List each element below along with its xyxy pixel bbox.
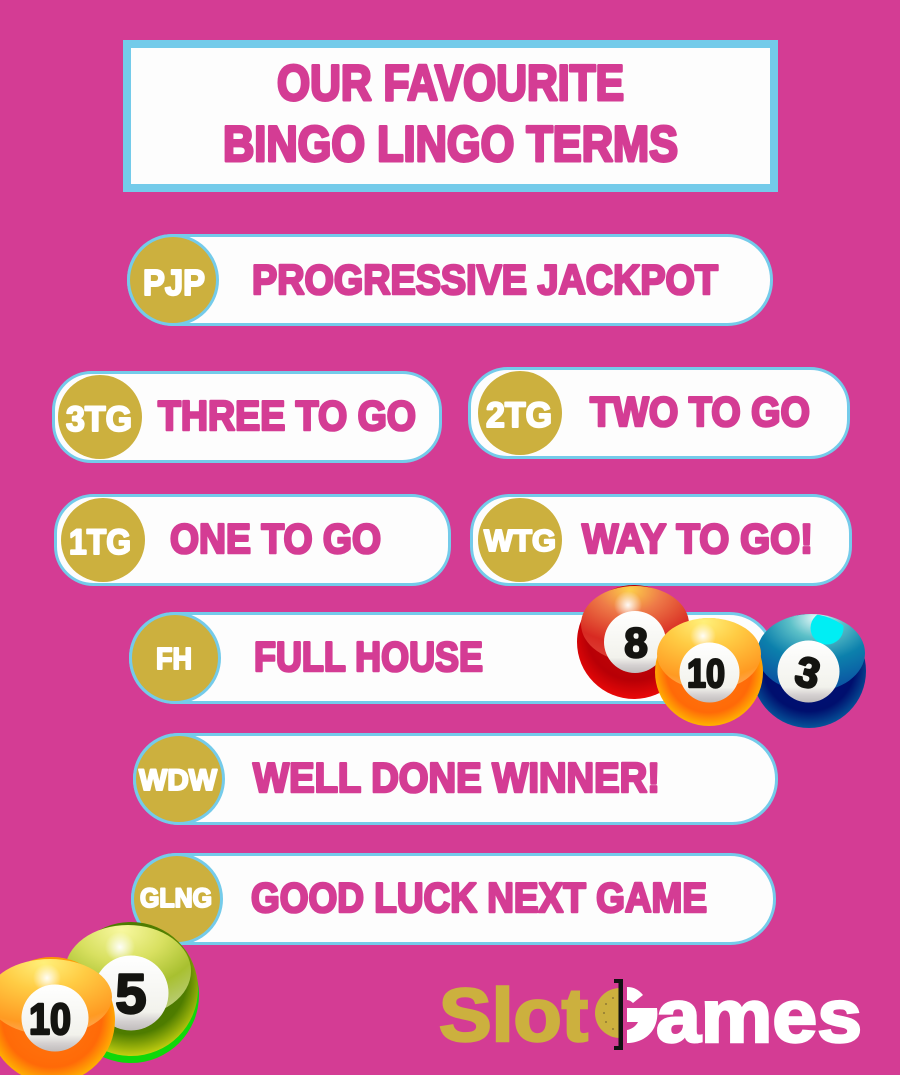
term: well done winner: WELL DONE WINNER! <box>253 754 660 801</box>
ball: 5 green: 5 <box>115 962 147 1025</box>
term: well done winner: WDW <box>139 764 218 797</box>
term: three to go: THREE TO GO <box>158 392 416 439</box>
term: two to go <box>470 368 848 458</box>
title line 1: OUR FAVOURITE <box>277 55 624 111</box>
term: way to go: WTG <box>484 523 556 558</box>
term: way to go: WAY TO GO! <box>582 515 813 562</box>
term: one to go: ONE TO GO <box>170 515 381 562</box>
ball: 5 green <box>63 922 199 1063</box>
ball: 10 orange bottom left: 10 <box>29 995 71 1044</box>
term: three to go <box>54 372 440 462</box>
title box <box>127 44 774 188</box>
term: two to go: TWO TO GO <box>590 388 810 435</box>
logo icon: black bar <box>614 979 623 1050</box>
title line 2: BINGO LINGO TERMS <box>223 116 678 172</box>
ball: 3 blue: 3 <box>791 647 825 698</box>
term: full house: FH <box>156 641 192 676</box>
term: two to go: 2TG <box>486 396 552 435</box>
term: good luck next game: GLNG <box>140 883 212 913</box>
ball: 8 red <box>577 585 691 699</box>
ball: 3 blue <box>752 612 866 728</box>
logo word: ames: ames <box>656 974 862 1058</box>
term: full house: FULL HOUSE <box>254 633 483 680</box>
ball: 10 orange: 10 <box>687 652 725 696</box>
term: three to go: 3TG <box>66 400 132 439</box>
ball: 8 red: 8 <box>624 619 648 666</box>
term: good luck next game <box>132 854 774 944</box>
term: well done winner <box>134 734 776 824</box>
term: one to go <box>56 496 450 584</box>
term: progressive jackpot <box>128 236 772 324</box>
term: good luck next game: GOOD LUCK NEXT GAME <box>251 874 707 921</box>
ball: 10 orange <box>655 618 763 726</box>
logo word: Slot: Slot <box>439 973 588 1057</box>
term: progressive jackpot: PJP <box>143 262 205 303</box>
term: one to go: 1TG <box>69 523 131 562</box>
logo icon: melon half <box>595 988 620 1038</box>
term: progressive jackpot: PROGRESSIVE JACKPOT <box>252 256 718 303</box>
logo: SlotGames <box>439 973 862 1058</box>
term: way to go <box>472 496 850 584</box>
ball: 10 orange bottom left <box>0 957 115 1075</box>
logo letter: G half <box>627 987 657 1043</box>
term: full house <box>130 614 774 702</box>
